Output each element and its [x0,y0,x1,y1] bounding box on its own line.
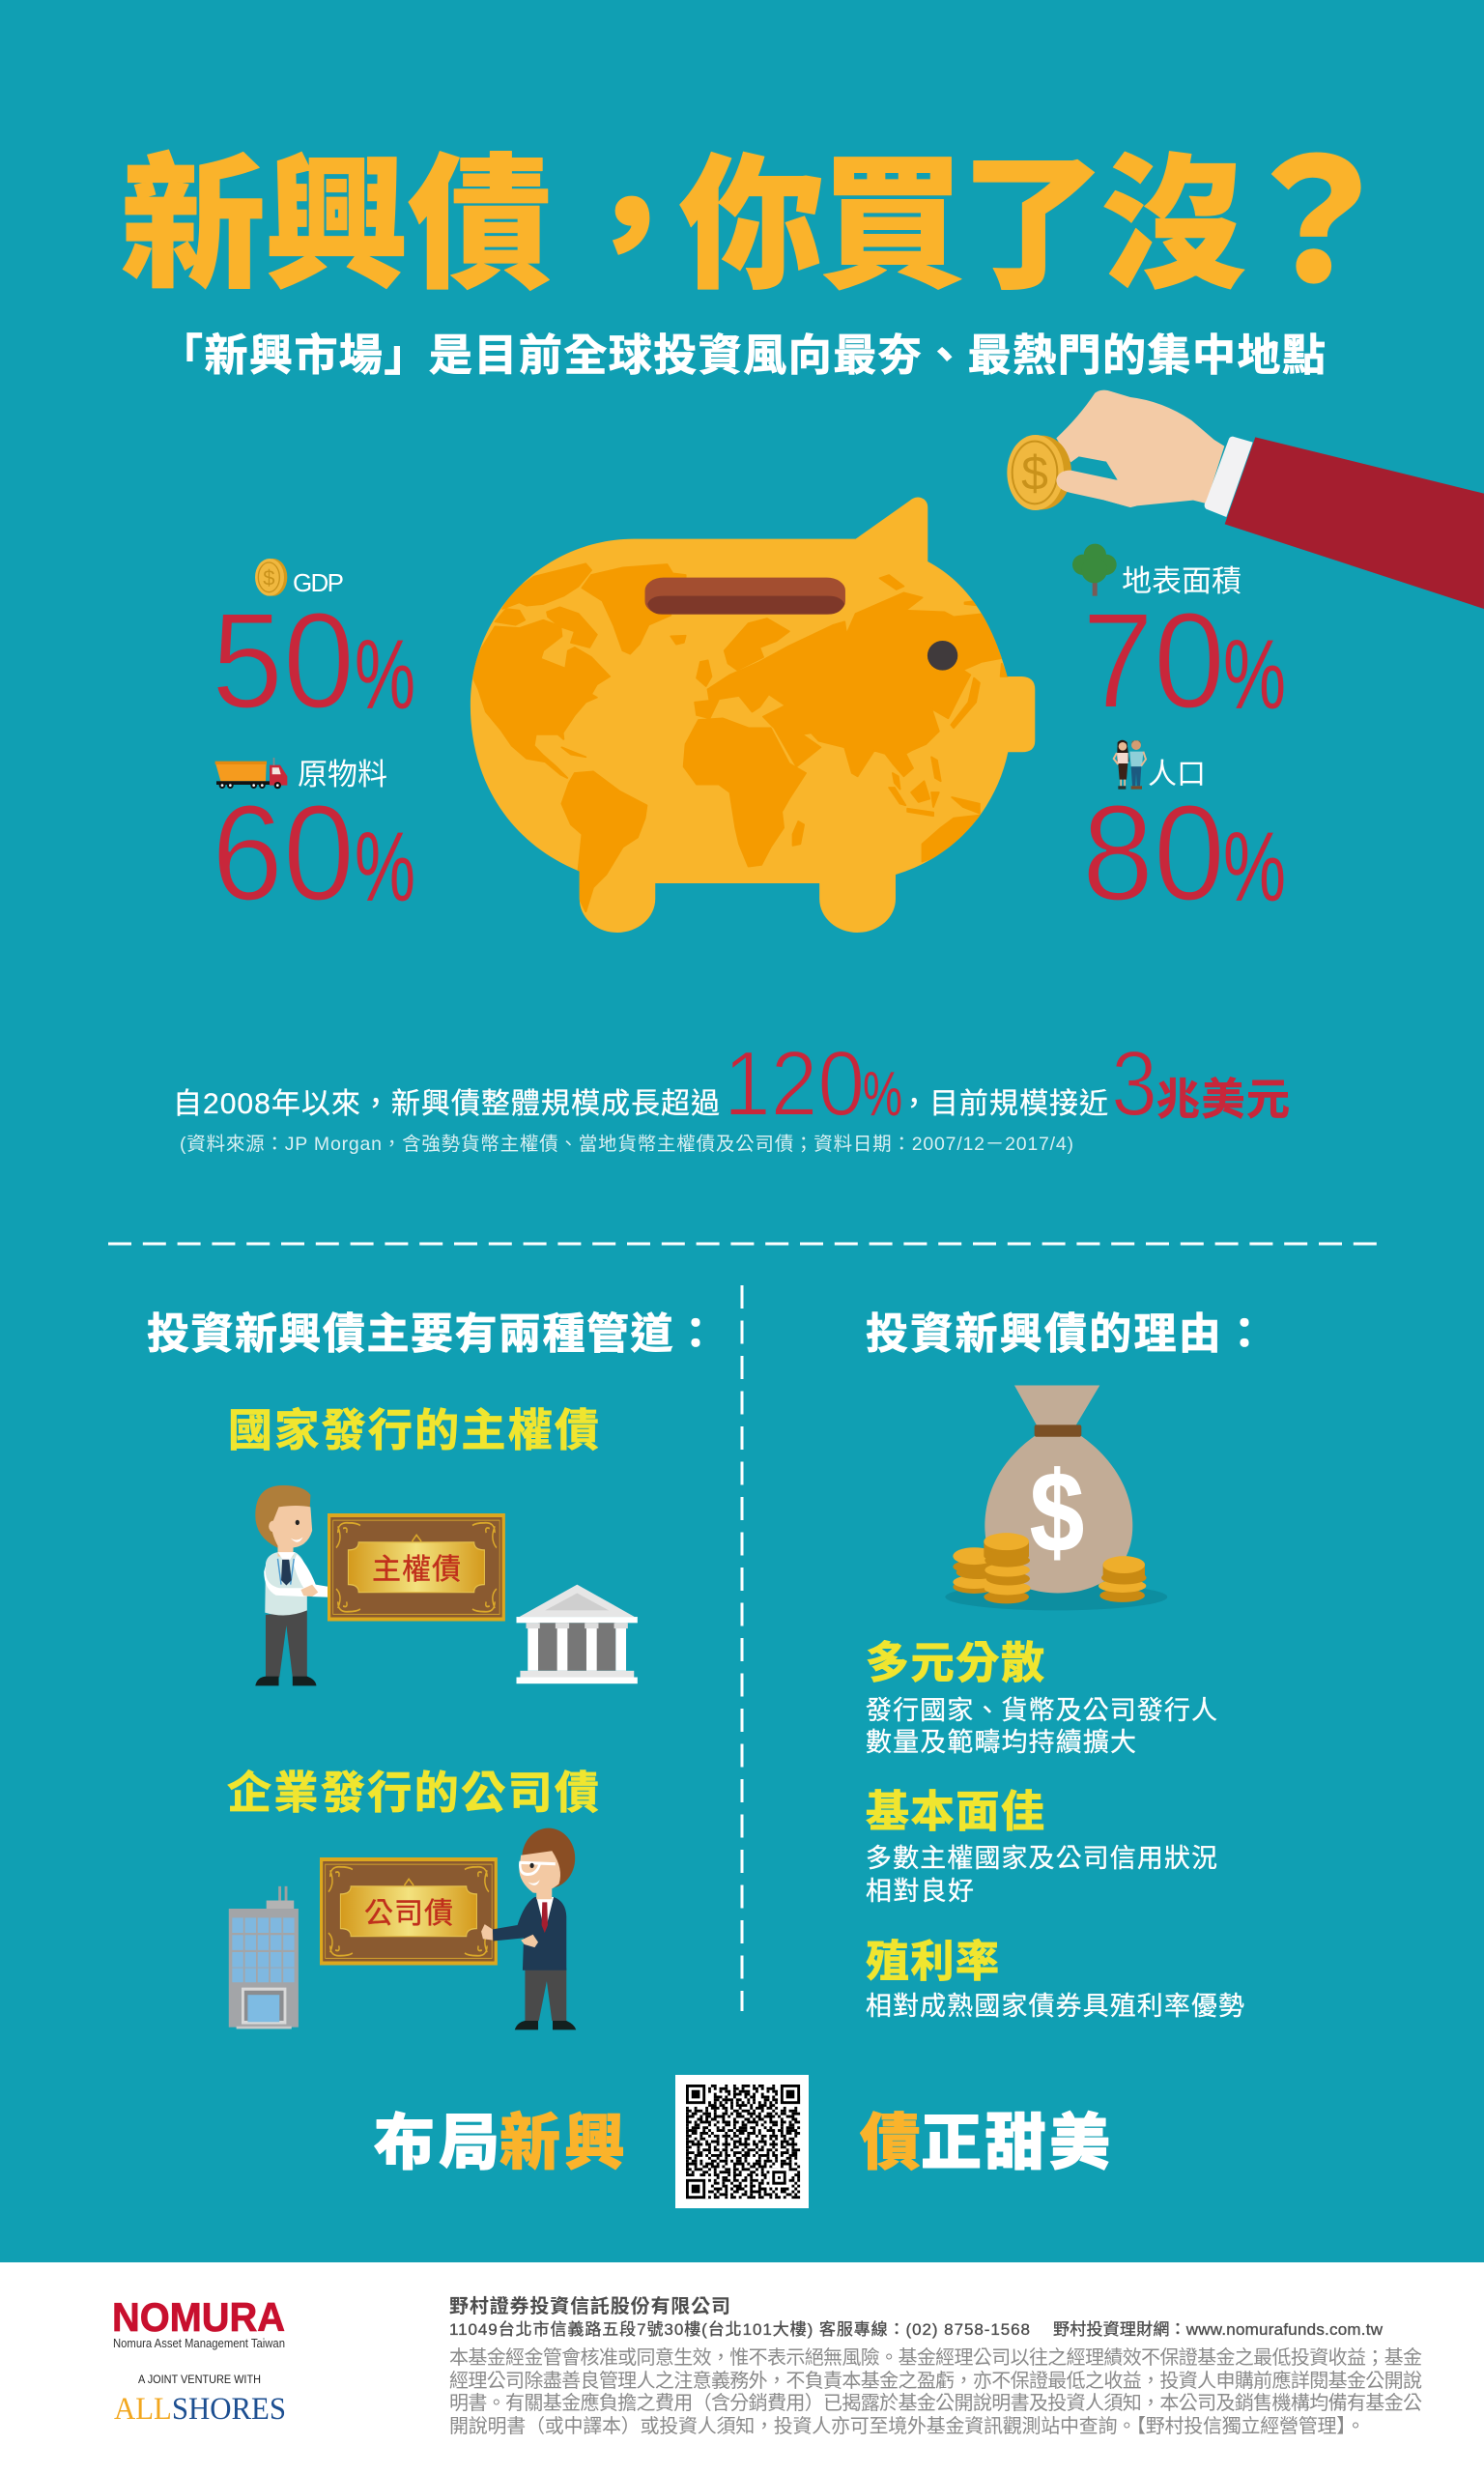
icon: truck [215,758,287,789]
growth statement [173,1032,1290,1136]
reason: fundamentals [866,1787,1217,1906]
title [121,129,1400,318]
icon: tree [1072,544,1117,596]
subtitle: 「新興市場」是目前全球投資風向最夯、最熱門的集中地點 [159,331,1326,380]
reason: yield [866,1937,1244,2021]
icon: coin [255,559,287,596]
icon: government building [517,1585,638,1683]
icon: hand holding coin [1007,390,1484,609]
heading: corporate: 企業發行的公司債 [227,1768,599,1818]
icon: coin: $ [263,565,274,590]
growth statement: 兆美元 [1156,1075,1290,1124]
slogan left [374,2110,625,2177]
title: ， [558,144,703,306]
title: 新興債 [121,144,552,306]
stat: GDP 50%: % [355,619,415,730]
company contact: 野村投資理財網：www.nomurafunds.com.tw [1053,2320,1384,2339]
stat: land area 70%: 地表面積 [1122,564,1241,598]
stat: population 80%: 80 [1082,776,1225,929]
stat: land area 70%: 70 [1082,584,1225,736]
slogan right: 正甜美 [921,2110,1110,2177]
plaque: sovereign bond [328,1513,505,1622]
stat: raw materials 60% [212,758,415,929]
stat: raw materials 60%: % [355,812,415,922]
plaque: sovereign bond: 主權債 [372,1554,461,1586]
icon: dollar sign: $ [1030,1449,1084,1576]
panel: two channels [147,1310,717,2029]
disclaimer: 明書。有關基金應負擔之費用（含分銷費用）已揭露於基金公開說明書及投資人須知，本公司及銷售機構均備有基金公 [449,2391,1422,2414]
stat: land area 70% [1072,544,1286,736]
reason: diversification [866,1638,1217,1757]
title: 你買了沒 [679,144,1245,306]
logo: Nomura: NOMURA [112,2294,285,2340]
reason: diversification: 數量及範疇均持續擴大 [866,1728,1136,1757]
slogan left: 新興 [499,2110,625,2177]
plaque: corporate bond [320,1857,498,1966]
heading: 投資新興債的理由： [866,1310,1266,1358]
icon: hand holding coin: $ [1021,446,1048,501]
reason: yield: 殖利率 [866,1937,999,1986]
icon: office building [229,1886,299,2028]
disclaimer [449,2346,1422,2437]
disclaimer: 開說明書（或中譯本）或投資人須知，投資人亦可至境外基金資訊觀測站中查詢。【野村投信獨立經營管理】。 [449,2415,1365,2437]
growth statement: % [863,1058,902,1129]
joint venture note: A JOINT VENTURE WITH [138,2373,261,2386]
stat: raw materials 60%: 60 [212,776,355,929]
footer panel [0,2262,1484,2474]
growth statement: ，目前規模接近 [899,1088,1108,1120]
logo: Nomura: Nomura Asset Management Taiwan [113,2337,285,2350]
reason: fundamentals: 基本面佳 [866,1787,1044,1836]
heading: sovereign: 國家發行的主權債 [228,1405,599,1455]
reason: fundamentals: 多數主權國家及公司信用狀況 [866,1844,1217,1873]
reason: fundamentals: 相對良好 [866,1877,974,1906]
plaque: corporate bond: 公司債 [364,1898,453,1930]
logo: Allshores: ALLSHORES [114,2392,286,2427]
reason: diversification: 多元分散 [866,1638,1044,1687]
stat: raw materials 60%: 原物料 [298,758,387,791]
growth statement: 3 [1111,1032,1157,1136]
icon: man presenting corporate bond [481,1828,576,2029]
icon: money bag [945,1386,1167,1610]
slogan left: 布局 [374,2110,499,2177]
stat: GDP 50%: GDP [293,568,344,597]
disclaimer: 經理公司除盡善良管理人之注意義務外，不負責本基金之盈虧，亦不保證最低之收益，投資人申購前應詳閱基金公開說 [449,2369,1422,2392]
stat: population 80%: 人口 [1148,759,1206,791]
source note: (資料來源：JP Morgan，含強勢貨幣主權債、當地貨幣主權債及公司債；資料日期：2007/12－2017/4) [180,1134,1073,1155]
reason: yield: 相對成熟國家債券具殖利率優勢 [866,1992,1244,2021]
stat: population 80%: % [1223,812,1286,922]
icon: piggy bank with world map [471,498,1035,933]
heading: 投資新興債主要有兩種管道： [147,1310,717,1358]
stat: GDP 50%: 50 [212,584,355,736]
reason: diversification: 發行國家、貨幣及公司發行人 [866,1696,1217,1725]
icon: people [1114,740,1146,790]
company name: 野村證券投資信託股份有限公司 [449,2294,730,2317]
disclaimer: 本基金經金管會核准或同意生效，惟不表示絕無風險。基金經理公司以往之經理績效不保證基金之最低投資收益；基金 [449,2346,1422,2369]
company contact [449,2320,1384,2339]
stat: population 80% [1082,740,1286,929]
panel: reasons [866,1310,1266,2021]
QR code [675,2075,809,2208]
icon: man presenting sovereign bond [255,1485,347,1685]
title: ？ [1231,129,1400,318]
growth statement: 自2008年以來，新興債整體規模成長超過 [173,1088,720,1120]
growth statement: 120 [724,1032,865,1136]
stat: land area 70%: % [1223,619,1286,730]
company contact: 11049台北市信義路五段7號30樓(台北101大樓) 客服專線：(02) 8758-1568 [449,2320,1030,2339]
slogan right: 債 [860,2110,921,2177]
stat: GDP 50% [212,559,415,736]
